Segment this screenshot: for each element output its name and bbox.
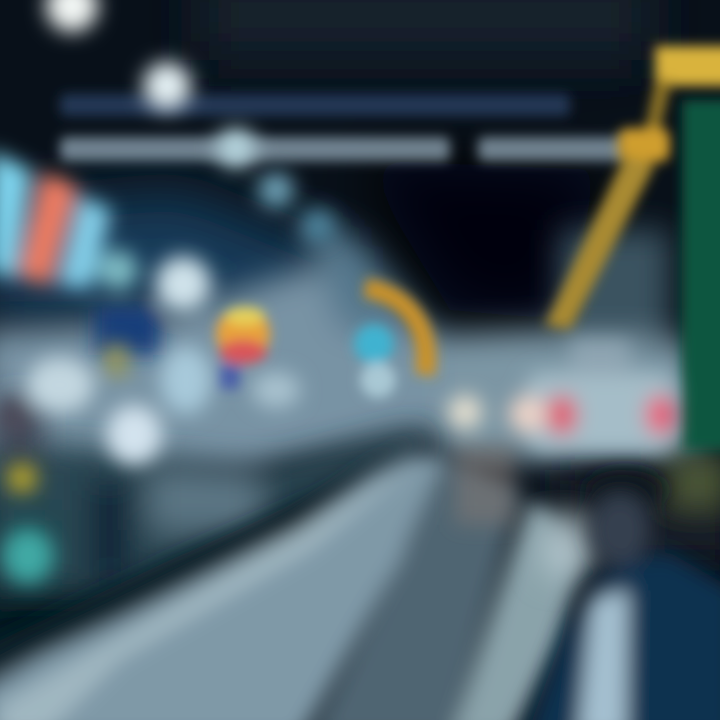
ceiling gradient haze — [0, 0, 650, 320]
person: hair — [585, 470, 665, 510]
yellow structure — [545, 46, 720, 330]
green column — [682, 100, 720, 450]
ceiling light beads — [46, 0, 334, 242]
person: jacket — [525, 550, 720, 720]
right floor/dark area — [545, 455, 720, 575]
left bright blobs — [0, 345, 300, 584]
left banners — [0, 150, 211, 355]
mid hall: blue-grey wall band — [0, 210, 700, 480]
title text band — [60, 94, 628, 161]
title placeholder lines — [60, 94, 570, 116]
person: face — [590, 494, 650, 566]
car with tail lights — [448, 340, 676, 525]
colourful sphere — [216, 307, 270, 389]
lower left dark kiosks — [0, 400, 430, 650]
orange arc with teal blob — [354, 288, 426, 398]
person: shirt — [578, 590, 628, 720]
floor — [0, 440, 590, 720]
person — [525, 470, 720, 720]
